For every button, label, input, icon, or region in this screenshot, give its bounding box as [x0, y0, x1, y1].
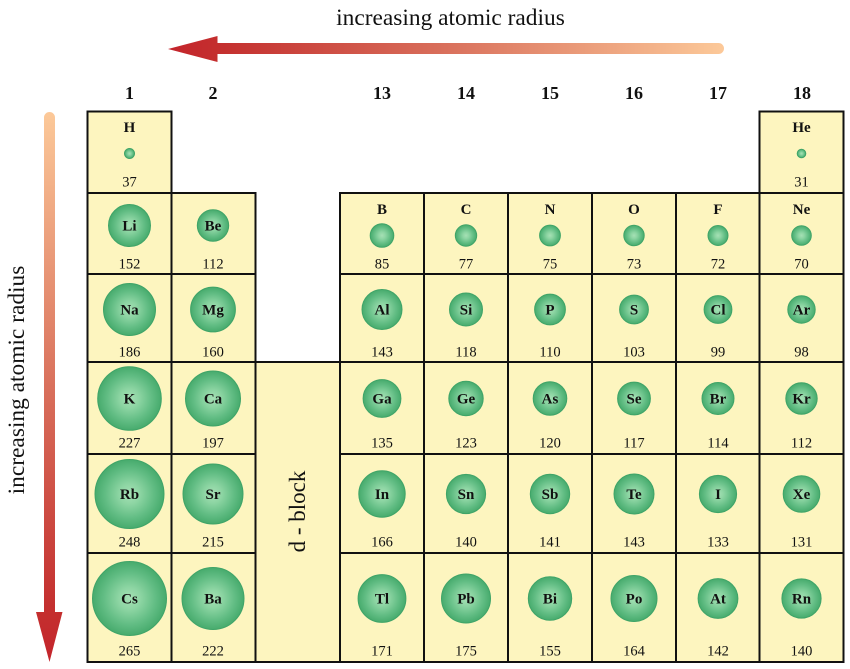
- element: He: He: [792, 120, 811, 136]
- element: Pb: 175: [455, 644, 477, 660]
- group number headings: [125, 83, 811, 103]
- element: Po: [592, 553, 676, 662]
- element: Br: Br: [710, 392, 727, 408]
- element: Al: 143: [371, 344, 393, 360]
- element: Rb: [88, 454, 172, 553]
- element: Cl: 99: [711, 344, 725, 360]
- element: Sb: 141: [539, 534, 561, 550]
- element: Ge: [424, 362, 508, 454]
- element: S: [592, 274, 676, 362]
- element: Xe: 131: [791, 534, 812, 550]
- element: Na: [88, 274, 172, 362]
- element: Li: [88, 193, 172, 274]
- element: P: [508, 274, 592, 362]
- element: Ne: [760, 193, 844, 274]
- element: C: [424, 193, 508, 274]
- element: Ba: Ba: [204, 592, 222, 608]
- element: Na: 186: [119, 344, 140, 360]
- element: H: H: [124, 120, 136, 136]
- arrow: horizontal, pointing left: [168, 36, 724, 62]
- element: Bi: [508, 553, 592, 662]
- element: Pb: [424, 553, 508, 662]
- element: Mg: [172, 274, 256, 362]
- element: I: I: [715, 487, 721, 503]
- element: Ge: Ge: [457, 392, 476, 408]
- element: I: [676, 454, 760, 553]
- element: Ge: 123: [455, 436, 477, 452]
- element: Kr: [760, 362, 844, 454]
- element: Cs: 265: [119, 644, 140, 660]
- element: Rn: 140: [791, 644, 812, 660]
- element: O: [592, 193, 676, 274]
- element: Ne: Ne: [793, 202, 811, 218]
- element: C: C: [461, 202, 471, 218]
- element: O: 73: [627, 256, 641, 272]
- element: Sn: [424, 454, 508, 553]
- element: H: 37: [122, 174, 137, 190]
- element: B: [340, 193, 424, 274]
- element: Sn: 140: [455, 534, 477, 550]
- arrow: vertical, pointing down: [36, 112, 62, 662]
- element: Xe: Xe: [793, 487, 811, 503]
- element: Sb: [508, 454, 592, 553]
- element: At: At: [710, 592, 726, 608]
- element: Mg: 160: [202, 344, 224, 360]
- panel: d-block: d - block: [285, 470, 310, 552]
- element: Si: Si: [460, 302, 472, 318]
- element: K: [88, 362, 172, 454]
- element: Ar: 98: [794, 344, 809, 360]
- element: Mg: Mg: [202, 302, 224, 318]
- element: Rb: 248: [119, 534, 140, 550]
- element: Ne: 70: [794, 256, 809, 272]
- element: As: 120: [539, 436, 561, 452]
- element: Ar: [760, 274, 844, 362]
- element: Sr: Sr: [206, 487, 221, 503]
- element: Cs: Cs: [121, 592, 138, 608]
- title: vertical axis label: increasing atomic radius: [4, 266, 30, 494]
- element: Br: [676, 362, 760, 454]
- element: Ca: 197: [202, 436, 224, 452]
- element: Ba: 222: [202, 644, 224, 660]
- element: O: O: [628, 202, 640, 218]
- element: Ca: [172, 362, 256, 454]
- element: Po: Po: [626, 592, 642, 608]
- group number headings: 2: [208, 83, 218, 103]
- element: Ba: [172, 553, 256, 662]
- element: Te: 143: [623, 534, 645, 550]
- element: Ca: Ca: [204, 392, 223, 408]
- element: In: 166: [371, 534, 393, 550]
- element: Sr: 215: [202, 534, 224, 550]
- element: Na: Na: [120, 302, 139, 318]
- element: I: 133: [707, 534, 729, 550]
- element: Rn: Rn: [792, 592, 812, 608]
- element: P: 110: [539, 344, 561, 360]
- element: Pb: Pb: [457, 592, 475, 608]
- element: Si: 118: [455, 344, 477, 360]
- group number headings: 13: [373, 83, 391, 103]
- element: Ga: 135: [371, 436, 393, 452]
- element: F: F: [713, 202, 723, 218]
- element: B: 85: [375, 256, 389, 272]
- element: Li: Li: [122, 218, 137, 234]
- group number headings: 16: [625, 83, 643, 103]
- element: B: B: [377, 202, 387, 218]
- element: F: 72: [711, 256, 725, 272]
- element: As: [508, 362, 592, 454]
- element: Li: 152: [119, 256, 140, 272]
- element: Kr: 112: [791, 436, 812, 452]
- element: Be: [172, 193, 256, 274]
- element: Kr: Kr: [792, 392, 811, 408]
- element: K: K: [124, 392, 136, 408]
- element: As: As: [542, 392, 558, 408]
- element: Sn: Sn: [458, 487, 475, 503]
- element: In: [340, 454, 424, 553]
- element: Te: [592, 454, 676, 553]
- element: Te: Te: [626, 487, 642, 503]
- element: P: P: [545, 302, 555, 318]
- group number headings: 17: [709, 83, 727, 103]
- group number headings: 18: [793, 83, 811, 103]
- element: Rb: Rb: [120, 487, 139, 503]
- element: Xe: [760, 454, 844, 553]
- element: Br: 114: [707, 436, 729, 452]
- element: Cs: [88, 553, 172, 662]
- element: S: S: [630, 302, 638, 318]
- element: In: In: [375, 487, 390, 503]
- element: Se: Se: [626, 392, 642, 408]
- element: Si: [424, 274, 508, 362]
- element: F: [676, 193, 760, 274]
- element: S: 103: [623, 344, 645, 360]
- element: At: [676, 553, 760, 662]
- group number headings: 15: [541, 83, 559, 103]
- element: Cl: [676, 274, 760, 362]
- panel: d-block: [256, 362, 340, 662]
- element: At: 142: [707, 644, 729, 660]
- element: Ar: Ar: [793, 302, 811, 318]
- element: Tl: [340, 553, 424, 662]
- element: Be: Be: [205, 218, 222, 234]
- element: Al: [340, 274, 424, 362]
- element: Tl: 171: [371, 644, 393, 660]
- element: K: 227: [119, 436, 140, 452]
- element: Ga: Ga: [372, 392, 392, 408]
- element: N: N: [545, 202, 556, 218]
- element: N: 75: [543, 256, 557, 272]
- element: Po: 164: [623, 644, 646, 660]
- element: Bi: 155: [539, 644, 561, 660]
- element: Ga: [340, 362, 424, 454]
- element: He: 31: [794, 174, 809, 190]
- element: Rn: [760, 553, 844, 662]
- group number headings: 1: [125, 83, 134, 103]
- element: He: [760, 112, 844, 193]
- element: Al: Al: [374, 302, 390, 318]
- title: horizontal axis label: increasing atomic radius: [336, 5, 565, 31]
- element: Se: [592, 362, 676, 454]
- element: Be: 112: [202, 256, 224, 272]
- element: H: [88, 112, 172, 193]
- group number headings: 14: [457, 83, 475, 103]
- element: Tl: Tl: [375, 592, 389, 608]
- element: Bi: Bi: [543, 592, 557, 608]
- element: N: [508, 193, 592, 274]
- element: Sr: [172, 454, 256, 553]
- element: Sb: Sb: [542, 487, 558, 503]
- element: Se: 117: [623, 436, 645, 452]
- element: Cl: Cl: [710, 302, 726, 318]
- element: C: 77: [459, 256, 473, 272]
